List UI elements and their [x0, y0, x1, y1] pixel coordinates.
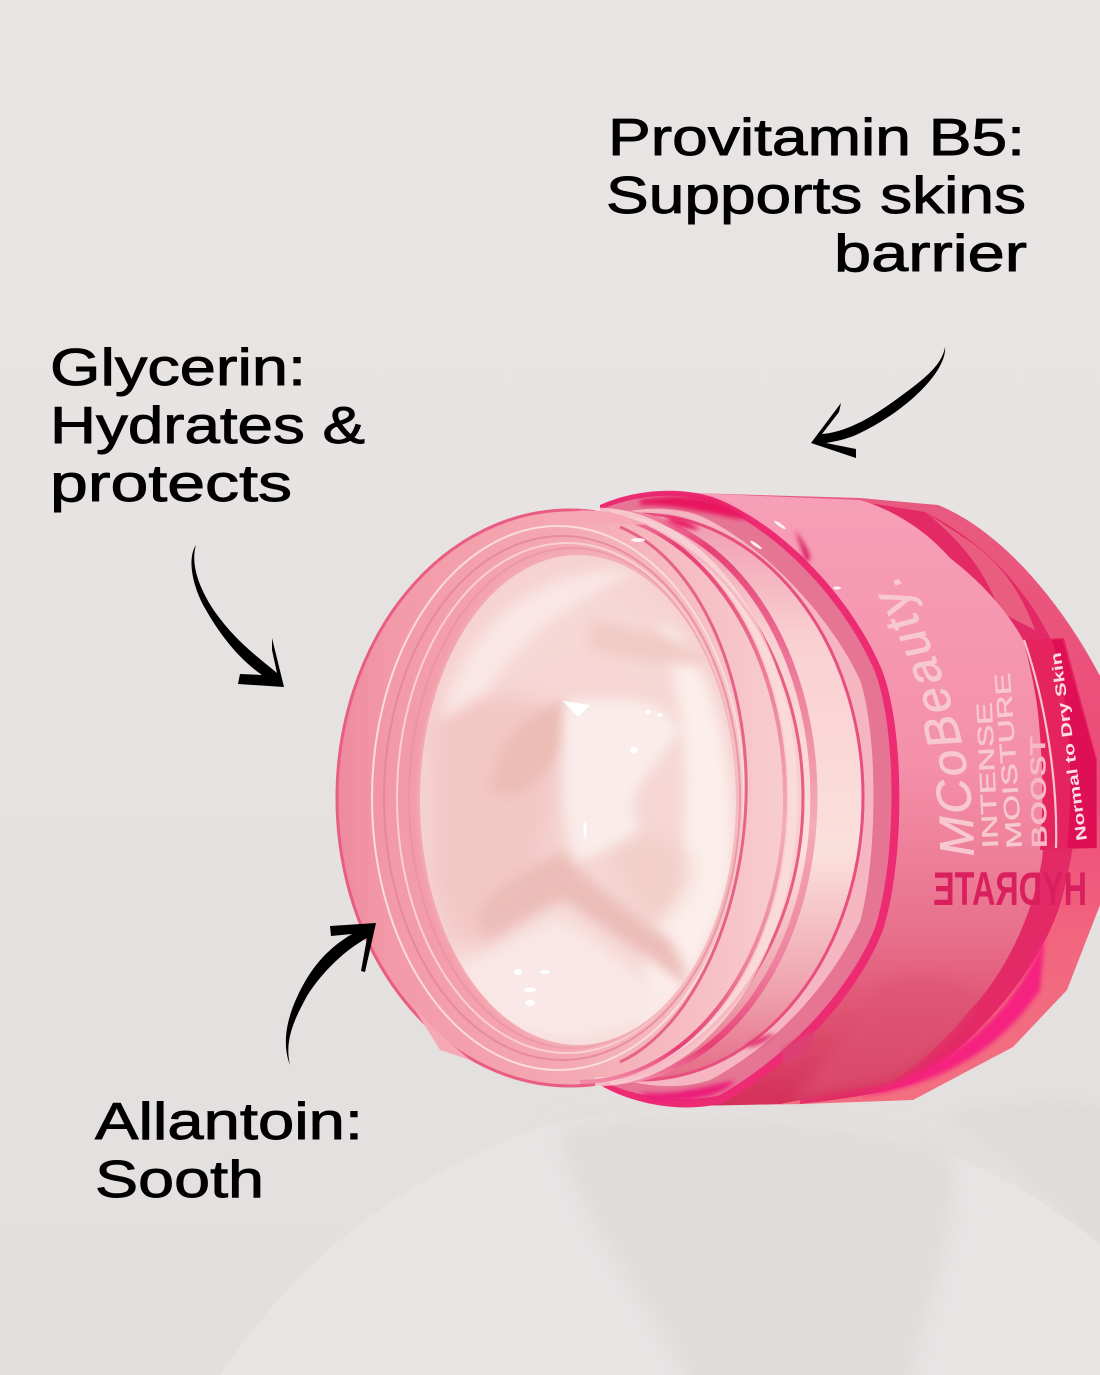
heading: Allantoin: [95, 1093, 363, 1209]
heading: Provitamin B5: [606, 109, 1027, 283]
cream: specular highlights: [514, 701, 663, 1006]
heading: Provitamin B5: Provitamin B5:: [608, 109, 1025, 167]
heading: Glycerin: protects: [50, 455, 292, 513]
top magenta reflections: [640, 496, 810, 561]
shoulder ring: outer edge: [600, 491, 899, 1107]
neck fill: [417, 514, 863, 1080]
jar base: saturated inner band: [800, 500, 1078, 1104]
cream: upper sheen: [440, 570, 640, 720]
cream: lower bright pool: [460, 917, 642, 1042]
label: white rule: [1024, 640, 1056, 848]
arrow: Provitamin B5 to jar: [811, 347, 945, 458]
bottom magenta reflections: [640, 1032, 815, 1101]
jar body: darker lower shading: [790, 977, 973, 1100]
rim tabs: [412, 511, 650, 1060]
inner lip dark line: [620, 527, 746, 1062]
neck thread rings: [580, 512, 815, 1082]
label: Normal to Dry Skin box: [1052, 639, 1096, 848]
glass highlights: [631, 520, 841, 590]
heading: Glycerin: Glycerin:: [50, 339, 306, 397]
mirrored hydrate lettering: HYDRATE: [933, 862, 1087, 915]
jar: [336, 490, 1100, 1108]
jar base: magenta glint: [860, 935, 1045, 1097]
product name: moisture: MOISTURE: [990, 672, 1027, 849]
arrow: Allantoin to jar: [286, 923, 376, 1065]
heading: Allantoin: Sooth: [95, 1151, 264, 1209]
jar base: coral reflection: [925, 512, 1035, 630]
cream: [418, 553, 738, 1047]
product name: intense: INTENSE: [972, 702, 1003, 849]
heading: Allantoin: Allantoin:: [95, 1093, 363, 1151]
inner wall thread lines: [372, 526, 744, 1070]
label: darker strip beside the product name: [1026, 638, 1097, 850]
glass rim and inner wall: [337, 510, 803, 1086]
cream: broad pink left shade: [430, 694, 560, 952]
heading: Provitamin B5: Supports skins: [606, 167, 1026, 225]
brand logotype: MCoBeauty.: [878, 579, 974, 855]
shoulder ring: tinted glass: [600, 496, 892, 1099]
jar body: frosted pink label band: [690, 493, 1045, 1106]
arrow: Glycerin to jar: [191, 545, 284, 687]
skin type label: Normal to Dry Skin: [1048, 651, 1091, 842]
heading: Provitamin B5: barrier: [834, 225, 1027, 283]
heading: Glycerin: Hydrates &: [50, 397, 365, 455]
jar base: faceted outer edge: [690, 493, 1100, 1106]
shoulder ring: pale band: [600, 509, 874, 1086]
cream: peach swirl folds: [490, 700, 565, 795]
cream: right pale area: [640, 620, 732, 1030]
heading: Glycerin: [50, 339, 365, 513]
pedestal with jar shadow: [220, 1102, 1100, 1375]
cream: bright central peak: [562, 699, 680, 860]
product name: boost: BOOST: [1025, 735, 1052, 848]
